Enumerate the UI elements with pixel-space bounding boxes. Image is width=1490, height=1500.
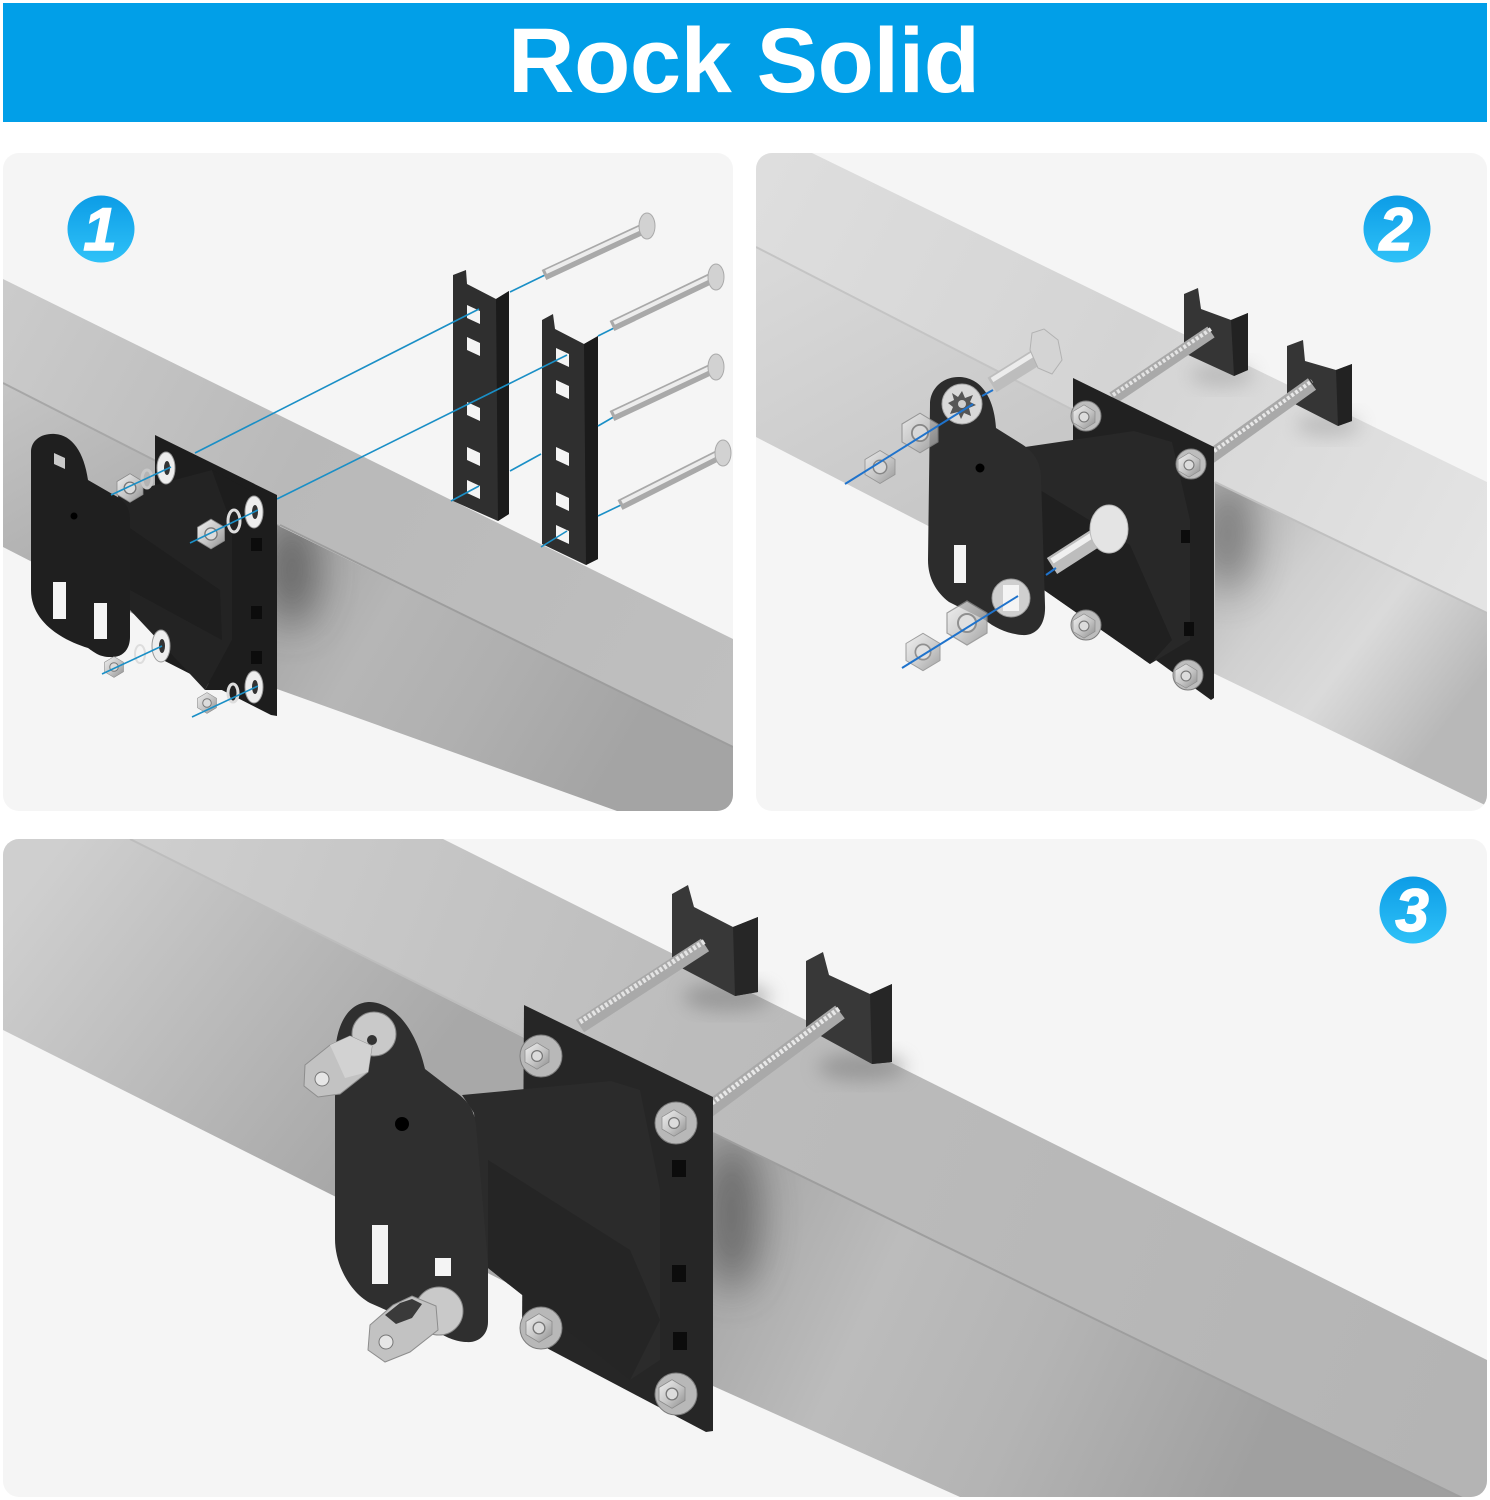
threaded rods bbox=[1113, 329, 1312, 457]
header banner bbox=[3, 3, 1487, 122]
mount bracket bbox=[31, 434, 277, 716]
mount bracket bbox=[335, 1002, 713, 1432]
upper ear hardware bbox=[304, 1012, 396, 1097]
U brackets bbox=[1184, 288, 1360, 437]
assembly lines bbox=[195, 275, 621, 547]
left channel bracket bbox=[453, 270, 509, 521]
badge: step number 3: 3 bbox=[1395, 877, 1429, 944]
badge: step number 2: 2 bbox=[1378, 196, 1413, 263]
badge: step number 3 bbox=[1380, 876, 1446, 944]
mount bracket bbox=[928, 377, 1214, 700]
plate nuts bbox=[1071, 401, 1206, 690]
badge: step number 1: 1 bbox=[83, 196, 117, 263]
panel: step 2 bbox=[756, 153, 1487, 811]
carriage bolts bbox=[544, 213, 731, 505]
assembly lines bbox=[845, 390, 1056, 668]
plate nuts bbox=[520, 1035, 697, 1415]
badge: step number 1 bbox=[68, 196, 134, 263]
square tube bbox=[3, 839, 1487, 1500]
right channel bracket bbox=[542, 314, 598, 565]
panel: step 1 bbox=[3, 153, 733, 811]
badge: step number 2 bbox=[1364, 196, 1430, 263]
lower ear hardware bbox=[368, 1287, 463, 1362]
loose nuts bbox=[865, 413, 987, 671]
star washers bbox=[942, 384, 1030, 617]
panel: step 3 bbox=[3, 839, 1487, 1500]
bracket hardware bbox=[102, 467, 258, 717]
threaded rods bbox=[580, 941, 840, 1110]
title: Rock Solid bbox=[508, 10, 980, 112]
square tube bbox=[3, 279, 733, 811]
square tube bbox=[756, 153, 1487, 806]
carriage bolts bbox=[992, 329, 1128, 566]
U brackets bbox=[672, 885, 906, 1081]
